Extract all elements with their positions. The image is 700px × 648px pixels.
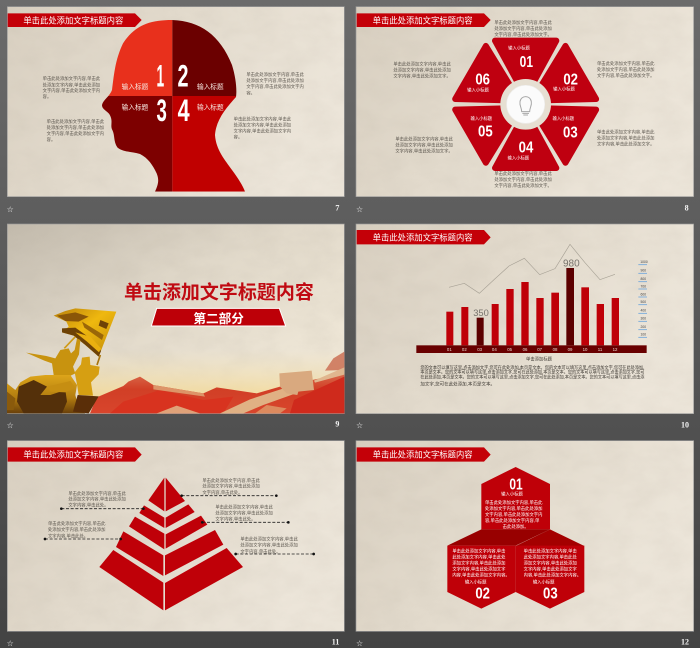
callout middle left: 单击此处添加文字内容,单击此 <box>48 520 106 527</box>
text block left lower: 处添加文字内容,单击此处添加 <box>47 124 104 131</box>
callout middle right: 文字内容,单击此处。 <box>215 515 255 522</box>
title tab <box>8 13 142 27</box>
six red triangle segments <box>455 41 596 168</box>
panel: slide 11 pyramid <box>7 441 344 648</box>
callout upper right: 处添加文字内容,单击此处添加 <box>202 483 260 490</box>
callout lower right: 文字内容,单击此处。 <box>240 548 280 555</box>
quadrant labels: 输入标题 <box>122 82 149 91</box>
quadrant labels: 输入标题 <box>122 102 149 111</box>
value axis legend: 100 <box>641 333 646 337</box>
quadrant numbers: 4 <box>178 92 190 128</box>
text block left lower: 容。 <box>47 136 55 143</box>
segment numbers: 05 <box>478 124 493 141</box>
hexagon 01 content: 击此处添加。 <box>503 523 529 530</box>
page number: 9 <box>335 420 339 429</box>
value axis legend: 400 <box>641 309 646 313</box>
callout upper right <box>180 477 278 497</box>
segment labels: 输入小标题 <box>467 86 489 93</box>
text block right lower: 处添加文字内容,单击此处添加 <box>234 122 291 129</box>
title tab: 单击此处添加文字标题内容 <box>23 15 123 25</box>
hexagon 02 content: 文字内容,单击此处添加文字 <box>452 566 506 573</box>
hexagon 02 content: 单击此处添加文字内容,单击 <box>452 548 506 555</box>
text block bottom: 处添加文字内容,单击此处添加 <box>494 176 552 183</box>
panel: slide 7 head diagram <box>7 7 344 214</box>
callout middle right: 单击此处添加文字内容,单击此 <box>215 503 273 510</box>
hexagon 01 content: 01 <box>509 476 523 493</box>
text block left upper: 容。 <box>43 93 51 100</box>
value axis legend: 300 <box>641 317 646 321</box>
quadrant numbers: 1 <box>156 58 164 94</box>
hexagon 03 content: 输入小标题 <box>533 578 555 585</box>
value labels: 350 <box>473 308 489 318</box>
title tab <box>357 13 491 27</box>
segment labels: 输入小标题 <box>508 154 530 161</box>
text block lower left: 单击此处添加文字内容,单击此 <box>395 135 453 142</box>
title tab: 单击此处添加文字标题内容 <box>373 15 473 25</box>
value axis legend: 700 <box>641 285 646 289</box>
text block right upper: 文字内容,单击此处添加文字内 <box>246 83 304 90</box>
text block right lower: 文字内容,单击此处添加文字内 <box>234 128 291 135</box>
text block right upper: 处添加文字内容,单击此处添加 <box>246 77 304 84</box>
title tab <box>357 447 491 462</box>
panel: slide 10 bar chart <box>356 224 694 430</box>
paragraph: 加文字,您可在此处添加,本页是文本。 <box>420 380 495 387</box>
quadrant numbers: 2 <box>177 58 188 94</box>
value labels: 980 <box>563 258 580 269</box>
hexagon 01 content: 容,单击此处添加文字内容,单 <box>485 517 540 524</box>
callout middle left: 文字内容,单击此处。 <box>48 532 88 539</box>
paragraph: 本页是文本。您的文本可以填写这里,点击添加文字,您可在此处添加,本页是文本。您的文本可以填写这里,点击添加文字,您可 <box>420 369 645 376</box>
hexagon 03 content: 此处添加文字内容,单击此处 <box>524 554 577 561</box>
text block lower left: 文字内容,单击此处添加文字。 <box>395 147 453 154</box>
hexagon 03 content: 添加文字内容,单击此处添加 <box>524 560 577 567</box>
text block top <box>494 19 552 38</box>
axis band with categories: 12 <box>613 347 618 352</box>
text block lower left <box>395 135 453 154</box>
segment numbers: 04 <box>519 140 534 157</box>
title tab <box>8 447 142 462</box>
panel: slide 9 section divider <box>7 224 344 430</box>
text block upper right: 单击此处添加文字内容,单击此 <box>597 60 655 67</box>
axis band with categories: 09 <box>568 347 573 352</box>
hexagon 01 content: 输入小标题 <box>501 491 523 498</box>
hexagon 01 content <box>485 476 543 530</box>
text block right upper: 单击此处添加文字内容,单击此 <box>246 71 304 78</box>
main heading: 单击添加文字标题内容 <box>124 280 314 303</box>
text block upper right: 处添加文字内容,单击此处添加 <box>597 66 654 73</box>
hexagon 02 content <box>452 548 510 603</box>
axis band with categories: 02 <box>462 347 467 352</box>
subtitle banner: 第二部分 <box>193 311 244 326</box>
text block lower right: 处添加文字内容,单击此处添加 <box>597 135 654 142</box>
page number: 11 <box>332 638 339 647</box>
axis band with categories: 10 <box>583 347 588 352</box>
hexagon 03 content <box>524 548 581 603</box>
footer star: ☆ <box>7 421 14 430</box>
panel: slide 8 hexagon diagram <box>356 7 694 214</box>
hexagon 03 content: 内容,单击此处添加文字内容。 <box>524 572 581 579</box>
text block right lower <box>234 116 292 141</box>
text block left lower: 单击此处添加文字内容,单击此 <box>47 118 105 125</box>
axis band with categories: 06 <box>523 347 528 352</box>
axis band with categories: 07 <box>537 347 543 352</box>
value axis legend: 1000 <box>640 260 648 264</box>
callout middle left: 处添加文字内容,单击此处添加 <box>48 526 105 533</box>
callout upper left <box>60 490 145 510</box>
text block bottom: 文字内容,单击此处添加文字。 <box>494 182 552 189</box>
segment numbers: 02 <box>563 71 578 88</box>
callout upper left: 单击此处添加文字内容,单击此 <box>68 490 126 497</box>
quadrant labels: 输入标题 <box>197 82 224 91</box>
footer star: ☆ <box>7 639 14 648</box>
callout lower right <box>234 536 315 555</box>
hexagon 01 content: 处添加文字内容,单击此处添加 <box>485 505 542 512</box>
title tab <box>357 230 491 244</box>
axis band with categories: 11 <box>598 347 603 352</box>
callout upper left: 文字内容,单击此处。 <box>68 502 108 509</box>
text block upper right: 文字内容,单击此处添加文字。 <box>597 72 654 79</box>
quadrant numbers: 3 <box>156 92 167 128</box>
hexagon 03 content: 03 <box>543 586 558 603</box>
text block bottom: 单击此处添加文字内容,单击此 <box>494 170 552 177</box>
segment numbers: 03 <box>563 125 578 142</box>
title tab: 单击此处添加文字标题内容 <box>23 450 123 460</box>
footer star: ☆ <box>356 421 363 430</box>
paragraph: 您的文本可以填写这里,点击添加文字,您可在此处添加,本页是文本。您的文本可以填写这里,点击添加文字,您可在此处添加, <box>420 364 644 371</box>
value axis legend: 600 <box>641 293 646 297</box>
text block bottom <box>494 170 552 189</box>
chart caption: 单击添加标题 <box>526 355 553 362</box>
hexagon 03 content: 文字内容,单击此处添加文字 <box>524 566 577 573</box>
hexagon 02 content: 02 <box>475 586 490 603</box>
quadrant labels: 输入标题 <box>197 102 224 111</box>
trend line <box>449 244 615 293</box>
hexagon cube shapes <box>447 467 584 609</box>
text block upper left: 处添加文字内容,单击此处添加 <box>393 67 451 74</box>
axis band with categories: 01 <box>447 347 452 352</box>
text block left upper <box>43 75 101 100</box>
segment labels <box>467 44 575 161</box>
text block upper left: 单击此处添加文字内容,单击此 <box>393 61 451 68</box>
hexagon 02 content: 添加文字内容,单击此处添加 <box>452 560 505 567</box>
text block lower right: 单击此处添加文字内容,单击此 <box>597 129 655 136</box>
text block right upper <box>246 71 304 96</box>
hexagon 02 content: 内容,单击此处添加文字内容。 <box>452 572 510 579</box>
quadrant numbers <box>156 58 190 128</box>
value axis legend: 500 <box>641 300 646 304</box>
segment numbers: 06 <box>475 71 490 88</box>
text block top: 文字内容,单击此处添加文字。 <box>494 31 552 38</box>
axis band with categories <box>416 345 647 353</box>
footer star: ☆ <box>356 639 363 648</box>
callout upper left: 处添加文字内容,单击此处添加 <box>68 496 126 503</box>
panel: slide 12 three hexagons <box>356 441 694 648</box>
text block lower right <box>597 129 655 148</box>
callout upper right: 单击此处添加文字内容,单击此 <box>202 477 260 484</box>
value labels <box>473 258 580 318</box>
value axis legend: 200 <box>641 325 646 329</box>
hexagon 01 content: 文字内容,单击此处添加文字内 <box>485 511 542 518</box>
segment labels: 输入小标题 <box>471 115 493 122</box>
head silhouette with four quadrants <box>97 17 249 193</box>
great wall landscape <box>90 352 344 413</box>
hexagon 02 content: 此处添加文字内容,单击此处 <box>452 554 506 561</box>
flag <box>54 308 116 357</box>
callout middle left <box>44 520 122 540</box>
footer star: ☆ <box>7 205 14 214</box>
text block upper right <box>597 60 655 79</box>
segment numbers: 01 <box>520 54 533 71</box>
axis band with categories: 08 <box>553 347 558 352</box>
callout middle right: 处添加文字内容,单击此处添加 <box>215 509 273 516</box>
text block left upper: 单击此处添加文字内容,单击此 <box>43 75 101 82</box>
value axis legend: 900 <box>641 268 646 272</box>
text block left upper: 处添加文字内容,单击此处添加 <box>43 81 100 88</box>
axis band with categories: 03 <box>477 347 483 352</box>
segment labels: 输入小标题 <box>553 86 575 93</box>
text block right lower: 容。 <box>234 134 242 141</box>
text block right upper: 容。 <box>246 89 255 96</box>
text block upper left <box>393 61 451 80</box>
segment labels: 输入小标题 <box>553 115 575 122</box>
quadrant labels <box>122 82 224 111</box>
figures <box>26 338 80 377</box>
text block right lower: 单击此处添加文字内容,单击此 <box>234 116 292 123</box>
text block top: 单击此处添加文字内容,单击此 <box>494 19 552 26</box>
segment labels: 输入小标题 <box>508 44 530 51</box>
hexagon 02 content: 输入小标题 <box>465 578 487 585</box>
page number: 7 <box>335 204 339 213</box>
callout middle right <box>201 503 290 524</box>
callout upper right: 文字内容,单击此处。 <box>202 489 242 496</box>
title tab: 单击此处添加文字标题内容 <box>373 233 473 243</box>
text block left lower <box>47 118 105 143</box>
paragraph <box>420 364 645 387</box>
value axis legend: 800 <box>641 277 646 281</box>
hexagon 01 content: 单击此处添加文字内容,单击此 <box>485 499 543 506</box>
soldiers statue <box>7 308 116 413</box>
pyramid tiers <box>99 478 243 610</box>
footer star: ☆ <box>356 205 363 214</box>
callout lower right: 处添加文字内容,单击此处添加 <box>240 542 298 549</box>
text block lower right: 文字内容,单击此处添加文字。 <box>597 141 654 148</box>
page number: 8 <box>685 204 689 213</box>
centre circle with light bulb <box>500 79 551 130</box>
axis band with categories: 04 <box>492 347 497 352</box>
page number: 10 <box>681 420 689 429</box>
text block left upper: 文字内容,单击此处添加文字内 <box>43 87 100 94</box>
axis band with categories: 05 <box>507 347 513 352</box>
segment numbers <box>475 54 578 157</box>
text block upper left: 文字内容,单击此处添加文字。 <box>393 73 451 80</box>
subtitle banner <box>151 308 286 326</box>
callout lower right: 单击此处添加文字内容,单击此 <box>240 536 298 543</box>
value axis legend <box>638 260 648 337</box>
title tab: 单击此处添加文字标题内容 <box>373 450 473 460</box>
paragraph: 在此处添加,本页是文本。您的文本可以填写这里,点击添加文字,您可在此处添加,本页是文本。您的文本可以填写这里,点击添 <box>420 374 645 381</box>
page number: 12 <box>681 638 689 647</box>
bars <box>446 268 619 345</box>
text block lower left: 处添加文字内容,单击此处添加 <box>395 141 453 148</box>
text block left lower: 文字内容,单击此处添加文字内 <box>47 130 104 137</box>
hexagon 03 content: 单击此处添加文字内容,单击 <box>524 548 577 555</box>
text block top: 处添加文字内容,单击此处添加 <box>494 25 552 32</box>
